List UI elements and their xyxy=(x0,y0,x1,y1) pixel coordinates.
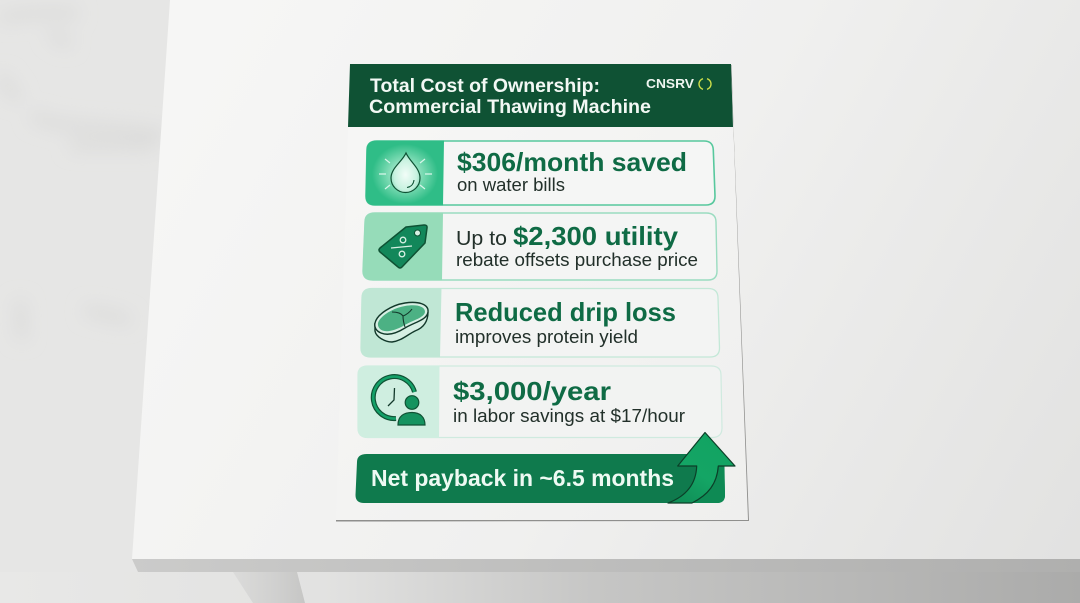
logo CNSRV: CNSRV xyxy=(646,77,695,91)
card 3: drip loss xyxy=(360,288,720,358)
card 2: utility rebate xyxy=(362,212,717,280)
card 2 text xyxy=(456,221,698,270)
icon: price tag xyxy=(379,225,427,268)
poster sheet xyxy=(336,65,748,520)
payback banner xyxy=(356,432,735,503)
card 1: water savings xyxy=(366,140,715,206)
poster xyxy=(336,64,749,522)
paper edge line xyxy=(336,65,749,522)
icon: water drop xyxy=(372,144,438,204)
card 2 text: Up to xyxy=(456,227,507,250)
card 1 text: $306/month saved xyxy=(457,147,687,177)
icon: clock and person xyxy=(373,377,425,425)
heading: Total Cost of Ownership: xyxy=(370,75,600,97)
table front edge xyxy=(132,559,1080,572)
card 2 text: $2,300 utility xyxy=(513,221,679,251)
card 4 text: in labor savings at $17/hour xyxy=(453,406,685,426)
card 4 text: $3,000/year xyxy=(453,376,611,406)
card 1 text: on water bills xyxy=(457,175,565,195)
heading xyxy=(369,75,651,118)
card 3 text: improves protein yield xyxy=(455,327,638,347)
card 3 text: Reduced drip loss xyxy=(455,297,676,327)
card 2 text: rebate offsets purchase price xyxy=(456,250,698,270)
arrow xyxy=(668,432,735,503)
logo CNSRV xyxy=(646,77,711,91)
card 3 text xyxy=(455,297,676,347)
card 4: labor savings xyxy=(358,366,722,438)
card 4 text xyxy=(453,376,685,426)
card 1 text xyxy=(457,147,687,195)
table leg xyxy=(233,572,305,603)
header band xyxy=(348,64,733,127)
heading: Commercial Thawing Machine xyxy=(369,96,651,118)
banner text: Net payback in ~6.5 months xyxy=(371,465,674,491)
icon: steak xyxy=(375,302,428,342)
